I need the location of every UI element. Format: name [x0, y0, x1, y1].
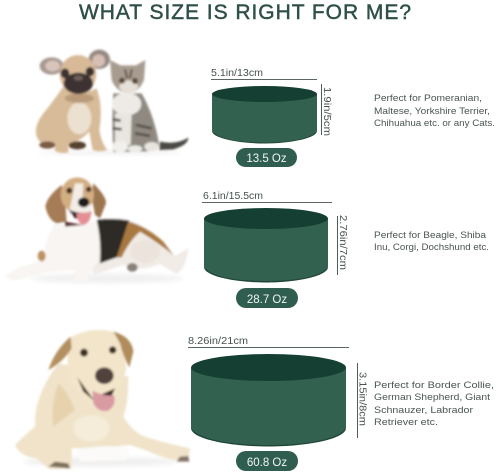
beagle ears [45, 185, 67, 223]
description small: Maltese, Yorkshire Terrier, [374, 106, 490, 116]
puppy ears [40, 57, 64, 75]
small bowl [212, 86, 317, 144]
description large [374, 380, 494, 428]
description small: Perfect for Pomeranian, [374, 93, 482, 103]
height label large: 3.15in/8cm [356, 372, 368, 426]
description small: Chihuahua etc. or any Cats. [374, 118, 495, 128]
medium bowl [204, 208, 328, 282]
height label small: 1.9in/5cm [321, 87, 332, 136]
title: WHAT SIZE IS RIGHT FOR ME? [79, 1, 411, 24]
beagle head [61, 177, 94, 213]
height label medium: 2.76in/7cm [337, 215, 348, 270]
capacity pill large: 60.8 Oz [247, 457, 287, 469]
labrador head [67, 330, 126, 412]
description medium: Inu, Corgi, Dochshund etc. [374, 242, 489, 252]
description large: Retriever etc. [374, 417, 438, 428]
small bowl dimensions [211, 68, 332, 136]
capacity pill medium [236, 288, 298, 308]
kitten body [159, 138, 188, 150]
description medium [374, 230, 489, 252]
width label medium: 6.1in/15.5cm [203, 191, 263, 202]
description large: German Shepherd, Giant [374, 392, 490, 403]
photo: french bulldog puppy and kitten [36, 50, 188, 155]
photo: yellow labrador lying down [15, 330, 190, 469]
large bowl dimensions [188, 336, 368, 438]
photo: beagle lying down [4, 177, 188, 283]
puppy body [36, 87, 107, 153]
labrador body and legs [15, 363, 190, 469]
capacity pill small [236, 148, 297, 167]
large bowl [191, 354, 346, 446]
width label large: 8.26in/21cm [188, 336, 248, 347]
beagle chest and front legs [4, 220, 99, 283]
description large: Schnauzer, Labrador [374, 405, 473, 416]
puppy head [60, 55, 96, 94]
labrador ears [48, 337, 72, 370]
capacity pill large [236, 451, 298, 471]
capacity pill small: 13.5 Oz [246, 153, 287, 165]
medium bowl dimensions [202, 191, 348, 275]
description large: Perfect for Border Collie, [374, 380, 494, 391]
description small [374, 93, 495, 128]
width label small: 5.1in/13cm [211, 68, 263, 79]
capacity pill medium: 28.7 Oz [247, 294, 287, 306]
kitten head [110, 60, 145, 93]
description medium: Perfect for Beagle, Shiba [374, 230, 486, 240]
beagle collar [65, 222, 83, 227]
beagle hind body [90, 218, 188, 275]
